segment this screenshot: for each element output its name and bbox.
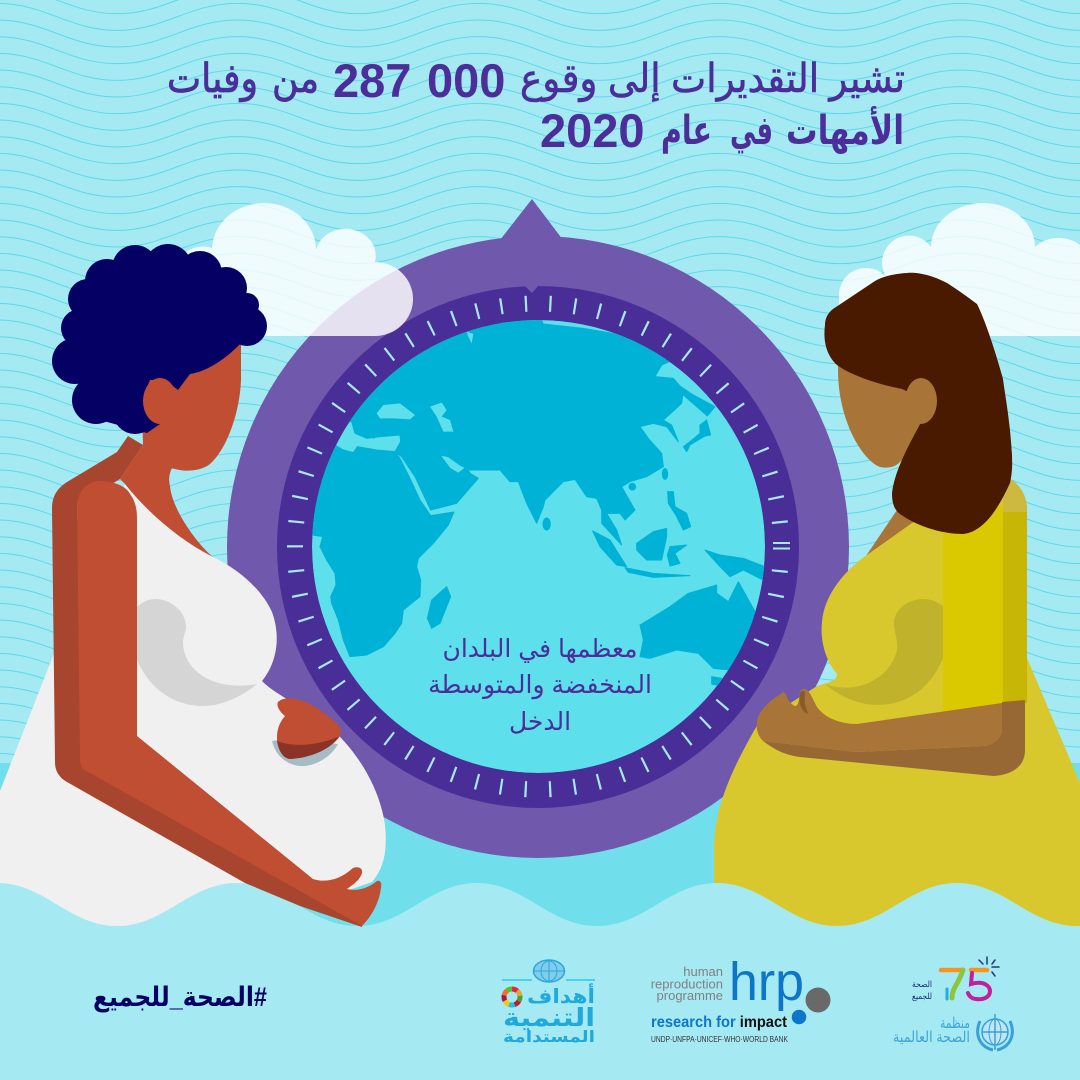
inland seas: [377, 332, 473, 432]
arm: [77, 481, 381, 926]
75 mark: [941, 957, 999, 999]
logo: hrp: [651, 952, 830, 1044]
breast shadow: [137, 599, 257, 706]
title: عام: [661, 109, 712, 154]
left woman figure: [52, 244, 381, 927]
tick marks: [295, 304, 794, 790]
thumb crease: [347, 873, 362, 889]
title: 2020: [540, 104, 645, 157]
partners: UNDP·UNFPA·UNICEF·WHO·WORLD BANK: [651, 1034, 788, 1044]
logo: WHO 75: [893, 957, 1012, 1050]
slogan: الصحة: [912, 979, 932, 989]
title: في: [730, 109, 773, 154]
UN emblem: [534, 960, 564, 982]
left cloud: [178, 203, 413, 336]
yellow dress: [714, 478, 1080, 935]
slogan: للجميع: [912, 991, 932, 1001]
face: [838, 350, 925, 468]
left woman skirt and body: [0, 484, 386, 935]
globe caption: [428, 635, 652, 736]
WHO name: الصحة العالمية: [893, 1029, 970, 1046]
neck and face: [120, 340, 241, 557]
programme name: [651, 964, 723, 1003]
right cloud: [839, 203, 1080, 336]
breast shadow: [825, 599, 943, 705]
title: 000: [427, 54, 505, 107]
ear: [143, 378, 177, 424]
outer purple ring with pointer: [227, 199, 849, 858]
goals wordmark: المستدامة: [503, 1029, 595, 1046]
globe caption: الدخل: [509, 708, 571, 736]
title: الأمهات: [786, 105, 904, 154]
hand on belly: [277, 698, 341, 759]
globe: [293, 303, 765, 773]
blue dot: [792, 1010, 806, 1024]
white dress: [0, 484, 386, 935]
logo: sustainable development goals: [502, 960, 595, 1046]
title: 287: [333, 54, 411, 107]
rule: [502, 979, 595, 981]
title: من: [272, 57, 319, 102]
bright sleeve: [943, 505, 1003, 714]
hair: [824, 273, 1012, 534]
neck: [866, 510, 925, 556]
right woman skirt: [714, 478, 1080, 935]
forearm and hand: [757, 689, 1002, 752]
sea band: [0, 763, 1080, 933]
ear: [905, 378, 937, 424]
globe caption: معظمها في البلدان: [442, 635, 638, 664]
foreground wave: [0, 883, 1080, 1080]
hand shadow: [272, 738, 338, 766]
programme name: programme: [657, 988, 723, 1003]
goals wordmark: أهداف: [527, 982, 595, 1008]
right woman figure: [757, 273, 1025, 776]
goals wordmark: التنمية: [503, 1004, 595, 1032]
goals wordmark: [503, 982, 595, 1046]
hashtag: #الصحة_للجميع: [93, 982, 267, 1013]
grey dot: [806, 988, 830, 1012]
slogan: [912, 979, 932, 1001]
hair: [52, 244, 267, 434]
goals wheel: [504, 989, 520, 1005]
arm shadow side: [763, 700, 1025, 776]
title: تشير التقديرات إلى وقوع: [520, 57, 905, 102]
programme name: reproduction: [651, 976, 723, 992]
hrp letters: hrp: [729, 952, 804, 1012]
shaded sleeve band: [1003, 478, 1027, 706]
tagline: research for impact: [651, 1014, 787, 1031]
programme name: human: [683, 964, 723, 979]
WHO name: منظمة: [940, 1015, 970, 1032]
dark arm and back: [52, 436, 362, 927]
WHO emblem: [978, 1014, 1012, 1050]
title: [167, 54, 905, 157]
globe caption: المنخفضة والمتوسطة: [428, 671, 652, 700]
thumb stripe: [799, 691, 808, 714]
compass dial with globe: [227, 199, 849, 858]
land masses: [293, 303, 765, 685]
inner dark ring: [277, 286, 799, 808]
shoulder highlight: [1003, 478, 1027, 512]
WHO name: [893, 1015, 970, 1046]
top notch: [524, 285, 539, 293]
title: وفيات: [167, 57, 258, 102]
